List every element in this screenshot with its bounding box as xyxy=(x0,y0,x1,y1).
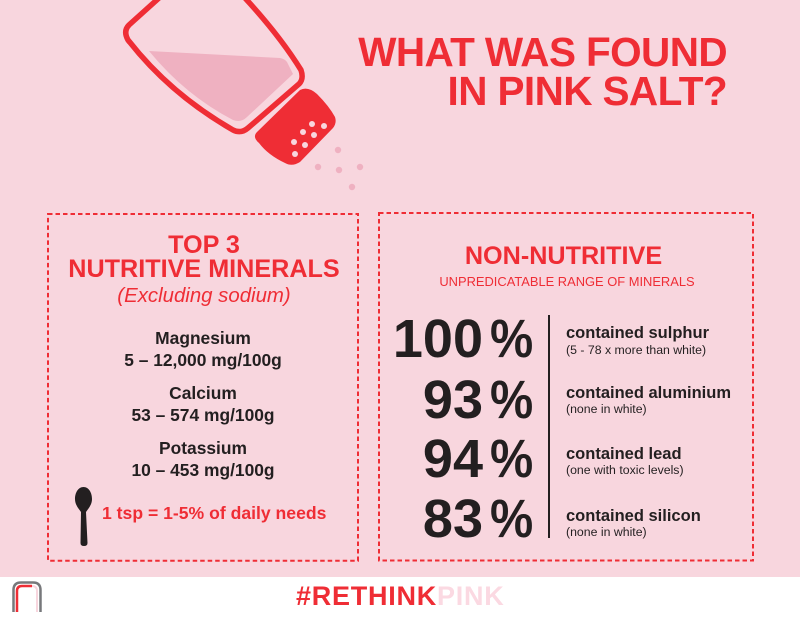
stat: lead percentage xyxy=(423,429,533,489)
vertical divider xyxy=(548,315,550,538)
icon: logo xyxy=(12,581,42,612)
subheading: (Excluding sodium) xyxy=(117,285,291,307)
icon: salt shaker xyxy=(122,0,364,190)
label: aluminium: contained aluminium xyxy=(566,384,731,402)
stat: sulphur percentage: % xyxy=(490,309,533,369)
panel: nutritive minerals xyxy=(47,213,359,562)
stat: aluminium percentage xyxy=(423,370,533,430)
label: sulphur: contained sulphur xyxy=(566,324,709,342)
stat: lead percentage: 94 xyxy=(423,429,483,489)
title: WHAT WAS FOUND xyxy=(358,29,727,75)
label: lead: (one with toxic levels) xyxy=(566,463,684,477)
panel heading: NON-NUTRITIVE xyxy=(465,242,662,270)
teaspoon note: 1 tsp = 1-5% of daily needs xyxy=(102,503,326,523)
hashtag: #RETHINKPINK xyxy=(296,581,505,611)
stat: silicon percentage: % xyxy=(490,489,533,549)
label: silicon: (none in white) xyxy=(566,525,647,539)
mineral: potassium xyxy=(131,438,275,480)
panel subheading: UNPREDICATABLE RANGE OF MINERALS xyxy=(439,274,695,289)
mineral: calcium: Calcium xyxy=(169,383,237,403)
mineral: magnesium: Magnesium xyxy=(155,328,251,348)
panel: non-nutritive xyxy=(378,212,754,562)
label: sulphur: (5 - 78 x more than white) xyxy=(566,343,706,357)
icon: spoon xyxy=(74,487,92,546)
panel heading: TOP 3 xyxy=(168,231,240,259)
label: sulphur xyxy=(566,324,709,357)
label: silicon xyxy=(566,507,701,539)
stat: sulphur percentage: 100 xyxy=(393,309,483,369)
mineral: calcium: 53 – 574 mg/100g xyxy=(131,405,275,425)
stat: aluminium percentage: % xyxy=(490,370,533,430)
label: lead: contained lead xyxy=(566,445,682,463)
label: aluminium: (none in white) xyxy=(566,402,647,416)
stat: lead percentage: % xyxy=(490,429,533,489)
mineral: calcium xyxy=(131,383,275,425)
stat: silicon percentage xyxy=(423,489,533,549)
mineral: magnesium xyxy=(124,328,282,370)
stat: sulphur percentage xyxy=(393,309,533,369)
label: lead xyxy=(566,445,684,477)
panel heading: NUTRITIVE MINERALS xyxy=(68,255,340,283)
title xyxy=(358,29,727,114)
label: aluminium xyxy=(566,384,731,416)
label: silicon: contained silicon xyxy=(566,507,701,525)
stat: silicon percentage: 83 xyxy=(423,489,483,549)
mineral: magnesium: 5 – 12,000 mg/100g xyxy=(124,350,282,370)
title: IN PINK SALT? xyxy=(448,68,727,114)
mineral: potassium: 10 – 453 mg/100g xyxy=(131,460,275,480)
panel heading xyxy=(68,231,340,283)
mineral: potassium: Potassium xyxy=(159,438,247,458)
stat: aluminium percentage: 93 xyxy=(423,370,483,430)
